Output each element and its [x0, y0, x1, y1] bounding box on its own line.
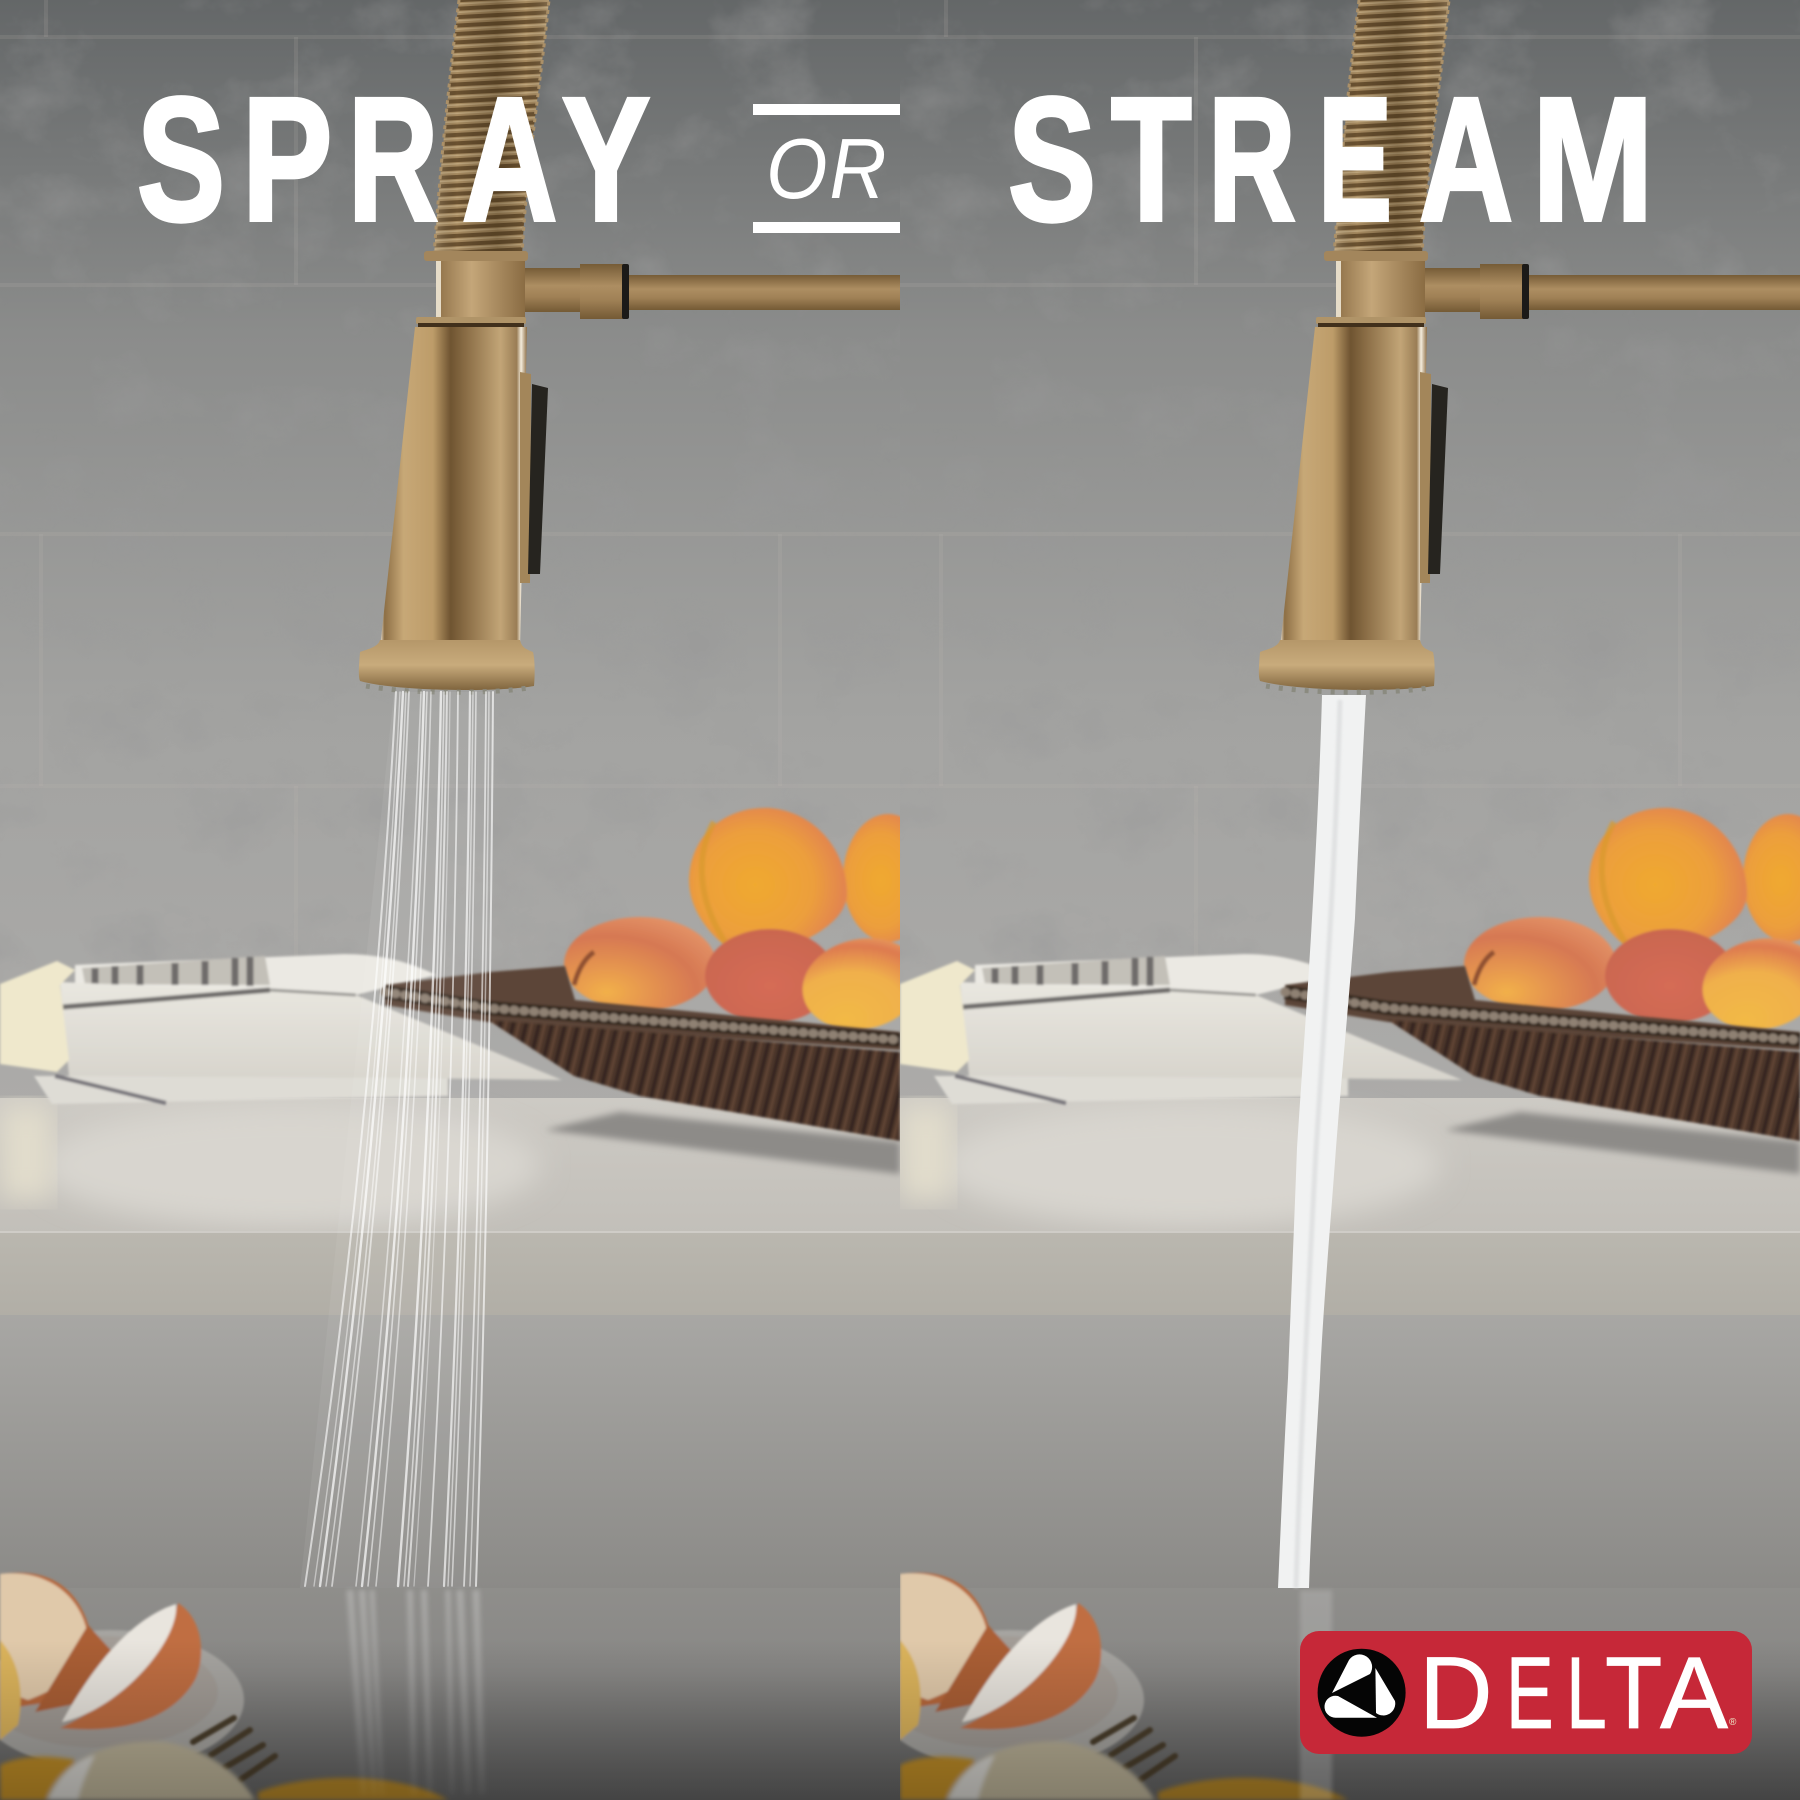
faucet hose	[434, 0, 549, 256]
heading: SPRAY: A	[462, 62, 557, 258]
fork tines	[193, 1718, 275, 1780]
faucet spray head	[359, 317, 535, 692]
stream water	[1278, 695, 1366, 1588]
spray reflection	[350, 1590, 482, 1795]
logo: Delta: D	[1419, 1636, 1493, 1750]
heading: SPRAY: P	[242, 62, 332, 258]
cabinet front	[0, 1315, 900, 1589]
foreground counter	[0, 1588, 900, 1800]
spray water	[300, 692, 494, 1588]
foreground fruit	[0, 1742, 448, 1800]
logo: Delta: ®	[1729, 1717, 1736, 1728]
stream reflection	[1300, 1590, 1332, 1800]
logo: Delta: A	[1660, 1636, 1728, 1750]
faucet trigger	[520, 372, 548, 583]
marble tile wall	[0, 0, 900, 1110]
heading: STREAM: R	[1208, 62, 1296, 258]
bottom vignette	[0, 1640, 900, 1800]
logo: Delta	[1300, 1631, 1752, 1754]
heading: STREAM: S	[1008, 62, 1096, 258]
heading: SPRAY: S	[137, 62, 225, 258]
heading: STREAM	[1008, 62, 1654, 258]
logo: Delta: E	[1506, 1636, 1554, 1750]
icon: Delta triangle mark	[1318, 1648, 1406, 1737]
text: OR between rules	[753, 104, 900, 233]
heading: SPRAY	[137, 62, 650, 258]
towel	[0, 954, 562, 1104]
heading: STREAM: E	[1318, 62, 1392, 258]
countertop	[0, 1098, 900, 1316]
logo: Delta: T	[1605, 1636, 1662, 1750]
heading: STREAM: T	[1111, 62, 1192, 258]
plate and apple slices	[0, 1573, 244, 1770]
basket shadow	[545, 1112, 900, 1174]
panel: stream photo	[876, 0, 1800, 1800]
faucet collar and junction	[424, 251, 528, 318]
logo: Delta: L	[1566, 1636, 1607, 1750]
heading: STREAM: M	[1532, 62, 1654, 258]
heading: SPRAY: Y	[562, 62, 650, 258]
heading: STREAM: A	[1418, 62, 1513, 258]
heading: SPRAY: R	[348, 62, 438, 258]
basket	[385, 966, 900, 1141]
peaches	[564, 808, 933, 1040]
faucet arm	[525, 264, 900, 319]
text: OR between rules: OR	[766, 122, 888, 217]
panel: spray photo	[0, 0, 933, 1800]
